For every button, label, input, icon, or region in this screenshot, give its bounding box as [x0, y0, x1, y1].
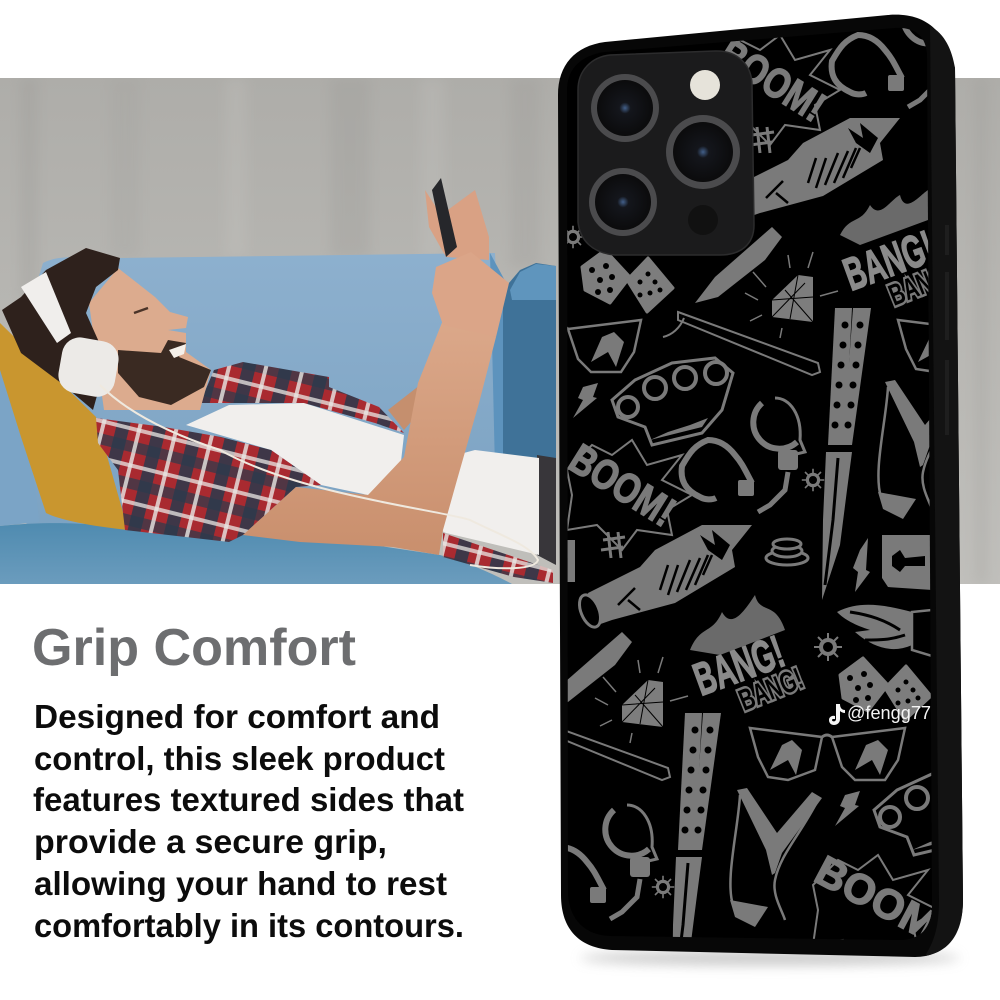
icon: handcuffs lower [568, 804, 659, 922]
icon: bullet splat 3 [802, 469, 824, 491]
text: BANG top: BANG! [837, 220, 941, 300]
icon: butterfly knife top [822, 308, 871, 600]
lens bottom left [589, 168, 657, 236]
icon: handcuffs middle [682, 398, 805, 512]
text: BOOM top: BOOM! [711, 30, 834, 131]
icon: razor blade left [565, 540, 575, 582]
wall [0, 78, 1000, 584]
flames top [840, 190, 928, 245]
watermark text: @fengg77 [847, 703, 931, 723]
near arm [243, 320, 496, 555]
heading: Grip Comfort [32, 619, 356, 677]
text: BANG lower: BANG! [687, 625, 791, 705]
icon: glasses left [567, 318, 643, 374]
body text: provide a secure grip, [34, 823, 387, 860]
flannel hem [443, 533, 553, 583]
case side [925, 26, 963, 956]
icon: slingshot lower [730, 788, 822, 927]
icon: bottle top [754, 118, 900, 215]
body text: control, this sleek product [34, 740, 445, 777]
headphone ear cup [58, 337, 119, 397]
flannel collar [200, 362, 404, 433]
side buttons [945, 225, 949, 435]
man [2, 178, 556, 583]
watermark [829, 703, 931, 725]
t-shirt [186, 403, 539, 555]
photo band: man on sofa [0, 78, 1000, 584]
icon: burst middle [567, 440, 692, 550]
icon: zigzag bolt [853, 538, 870, 592]
icon: bullet splat 1 [814, 633, 842, 661]
icon: glasses right [898, 320, 1000, 372]
icon: glasses lower [750, 728, 905, 780]
flash [690, 70, 720, 100]
icon: burst lower [813, 855, 938, 965]
lower hand [432, 252, 509, 337]
body text: features textured sides that [33, 781, 464, 818]
icon: razor blade [882, 535, 932, 590]
beard [118, 340, 211, 405]
sofa [0, 253, 556, 584]
icon: razor lower [568, 632, 672, 782]
lens right [666, 115, 740, 189]
camera module [578, 51, 754, 255]
yellow pillow [0, 323, 128, 530]
small phone [432, 178, 457, 257]
body text: allowing your hand to rest [34, 865, 447, 902]
upper fingers [425, 190, 489, 260]
screen [567, 28, 932, 940]
text: BANG second top: BANG! [884, 257, 958, 312]
icon: burst top [715, 35, 840, 145]
text: BANG second lower: BANG! [734, 662, 808, 717]
flames lower [690, 595, 785, 655]
body text: comfortably in its contours. [34, 907, 464, 944]
text: BOOM middle: BOOM! [561, 435, 684, 536]
icon: dice top [582, 250, 673, 312]
icon: hash top [750, 127, 774, 153]
text: BOOM lower: BOOM [808, 846, 945, 949]
eye [134, 308, 148, 313]
icon: razor top [663, 227, 820, 375]
icon: knuckle duster top [612, 358, 733, 445]
icon: slingshot right [878, 380, 970, 519]
icon: lightning lower [835, 791, 860, 826]
icon: lightning top [573, 383, 598, 418]
sensor [688, 205, 718, 235]
icon: bullet splat 2 [652, 876, 674, 898]
neck and face [89, 268, 211, 410]
icon: bottle lower [575, 525, 752, 630]
headphone band [21, 272, 71, 343]
hair [2, 248, 120, 410]
icon: bullet splat 4 [562, 226, 584, 248]
teeth [169, 344, 186, 358]
doodle pattern [567, 28, 932, 940]
far arm [388, 387, 418, 430]
lens top left [591, 74, 659, 142]
icon: diamond top [745, 252, 838, 338]
icon: hash lower [601, 532, 625, 558]
icon: handcuffs top [828, 28, 928, 110]
headphone cable [100, 385, 538, 568]
phone case [558, 14, 963, 971]
case body [558, 15, 963, 957]
icon: flaming bullet [837, 605, 932, 656]
icon: coins [766, 539, 808, 565]
flannel torso [96, 418, 321, 542]
icon: tiktok note [829, 704, 845, 725]
phone shadow [580, 951, 960, 965]
body text [33, 698, 464, 944]
icon: knuckle duster lower [874, 768, 995, 855]
trousers [537, 455, 556, 565]
icon: butterfly knife lower [672, 713, 721, 938]
icon: dice right [840, 658, 931, 720]
icon: diamond lower [595, 657, 688, 743]
body text: Designed for comfort and [34, 698, 440, 735]
